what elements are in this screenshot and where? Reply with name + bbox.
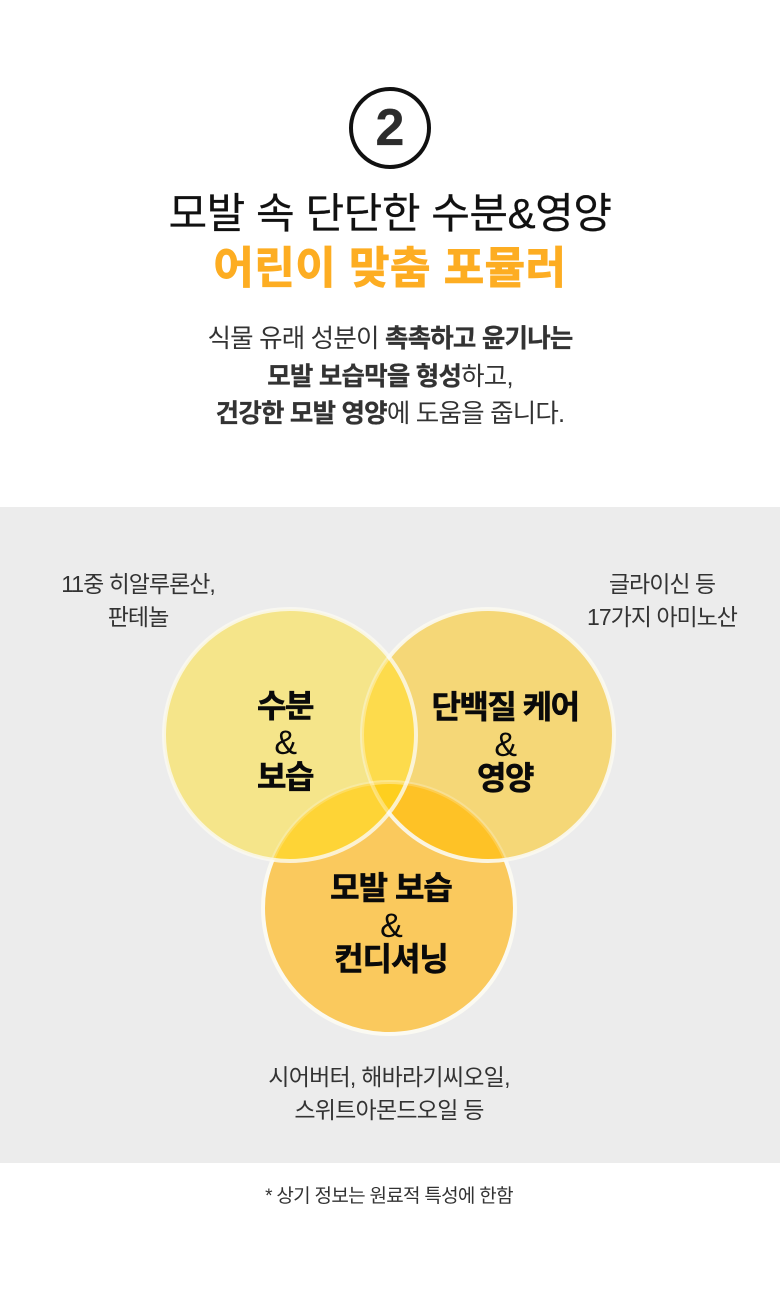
label: moisture: & [274,724,297,762]
label: hair conditioning [330,870,452,977]
note: right ingredients: 17가지 아미노산 [587,604,737,630]
note: bottom ingredients: 시어버터, 해바라기씨오일, [268,1064,510,1090]
label: hair conditioning: & [380,907,403,945]
footnote: * 상기 정보는 원료적 특성에 한함 [265,1186,513,1207]
text block: description: 건강한 모발 영양에 도움을 줍니다. [216,400,564,428]
overlap regions [272,658,504,861]
panel: grey venn background [0,507,780,1163]
label: protein care: 단백질 케어 [431,689,579,725]
text block: description: 식물 유래 성분이 촉촉하고 윤기나는 [207,325,573,353]
label: hair conditioning: 모발 보습 [330,870,452,906]
label: protein care [431,689,579,796]
circle outlines [162,607,616,863]
venn diagram [162,607,616,1036]
note: left ingredients [61,571,215,630]
note: left ingredients: 11중 히알루론산, [61,571,215,597]
label: hair conditioning: 컨디셔닝 [334,941,448,977]
note: bottom ingredients [268,1064,510,1123]
title: orange highlight line: 어린이 맞춤 포뮬러 [213,244,567,293]
text block: description: 모발 보습막을 형성하고, [267,362,513,390]
note: right ingredients [587,571,738,630]
circle: bottom [263,782,515,1034]
label: protein care: & [494,726,517,764]
label: moisture: 보습 [257,759,314,795]
note: bottom ingredients: 스위트아몬드오일 등 [294,1097,484,1123]
circle: left [164,609,416,861]
note: left ingredients: 판테놀 [108,604,168,630]
icon: number 2 badge [349,87,431,169]
note: right ingredients: 글라이신 등 [609,571,715,597]
title: first line: 모발 속 단단한 수분&영양 [168,190,612,237]
icon: number 2 badge: 2 [376,99,404,157]
circle: right [362,609,614,861]
label: moisture [257,688,314,795]
label: protein care: 영양 [477,760,534,796]
label: moisture: 수분 [257,688,314,724]
text block: description [207,325,573,428]
